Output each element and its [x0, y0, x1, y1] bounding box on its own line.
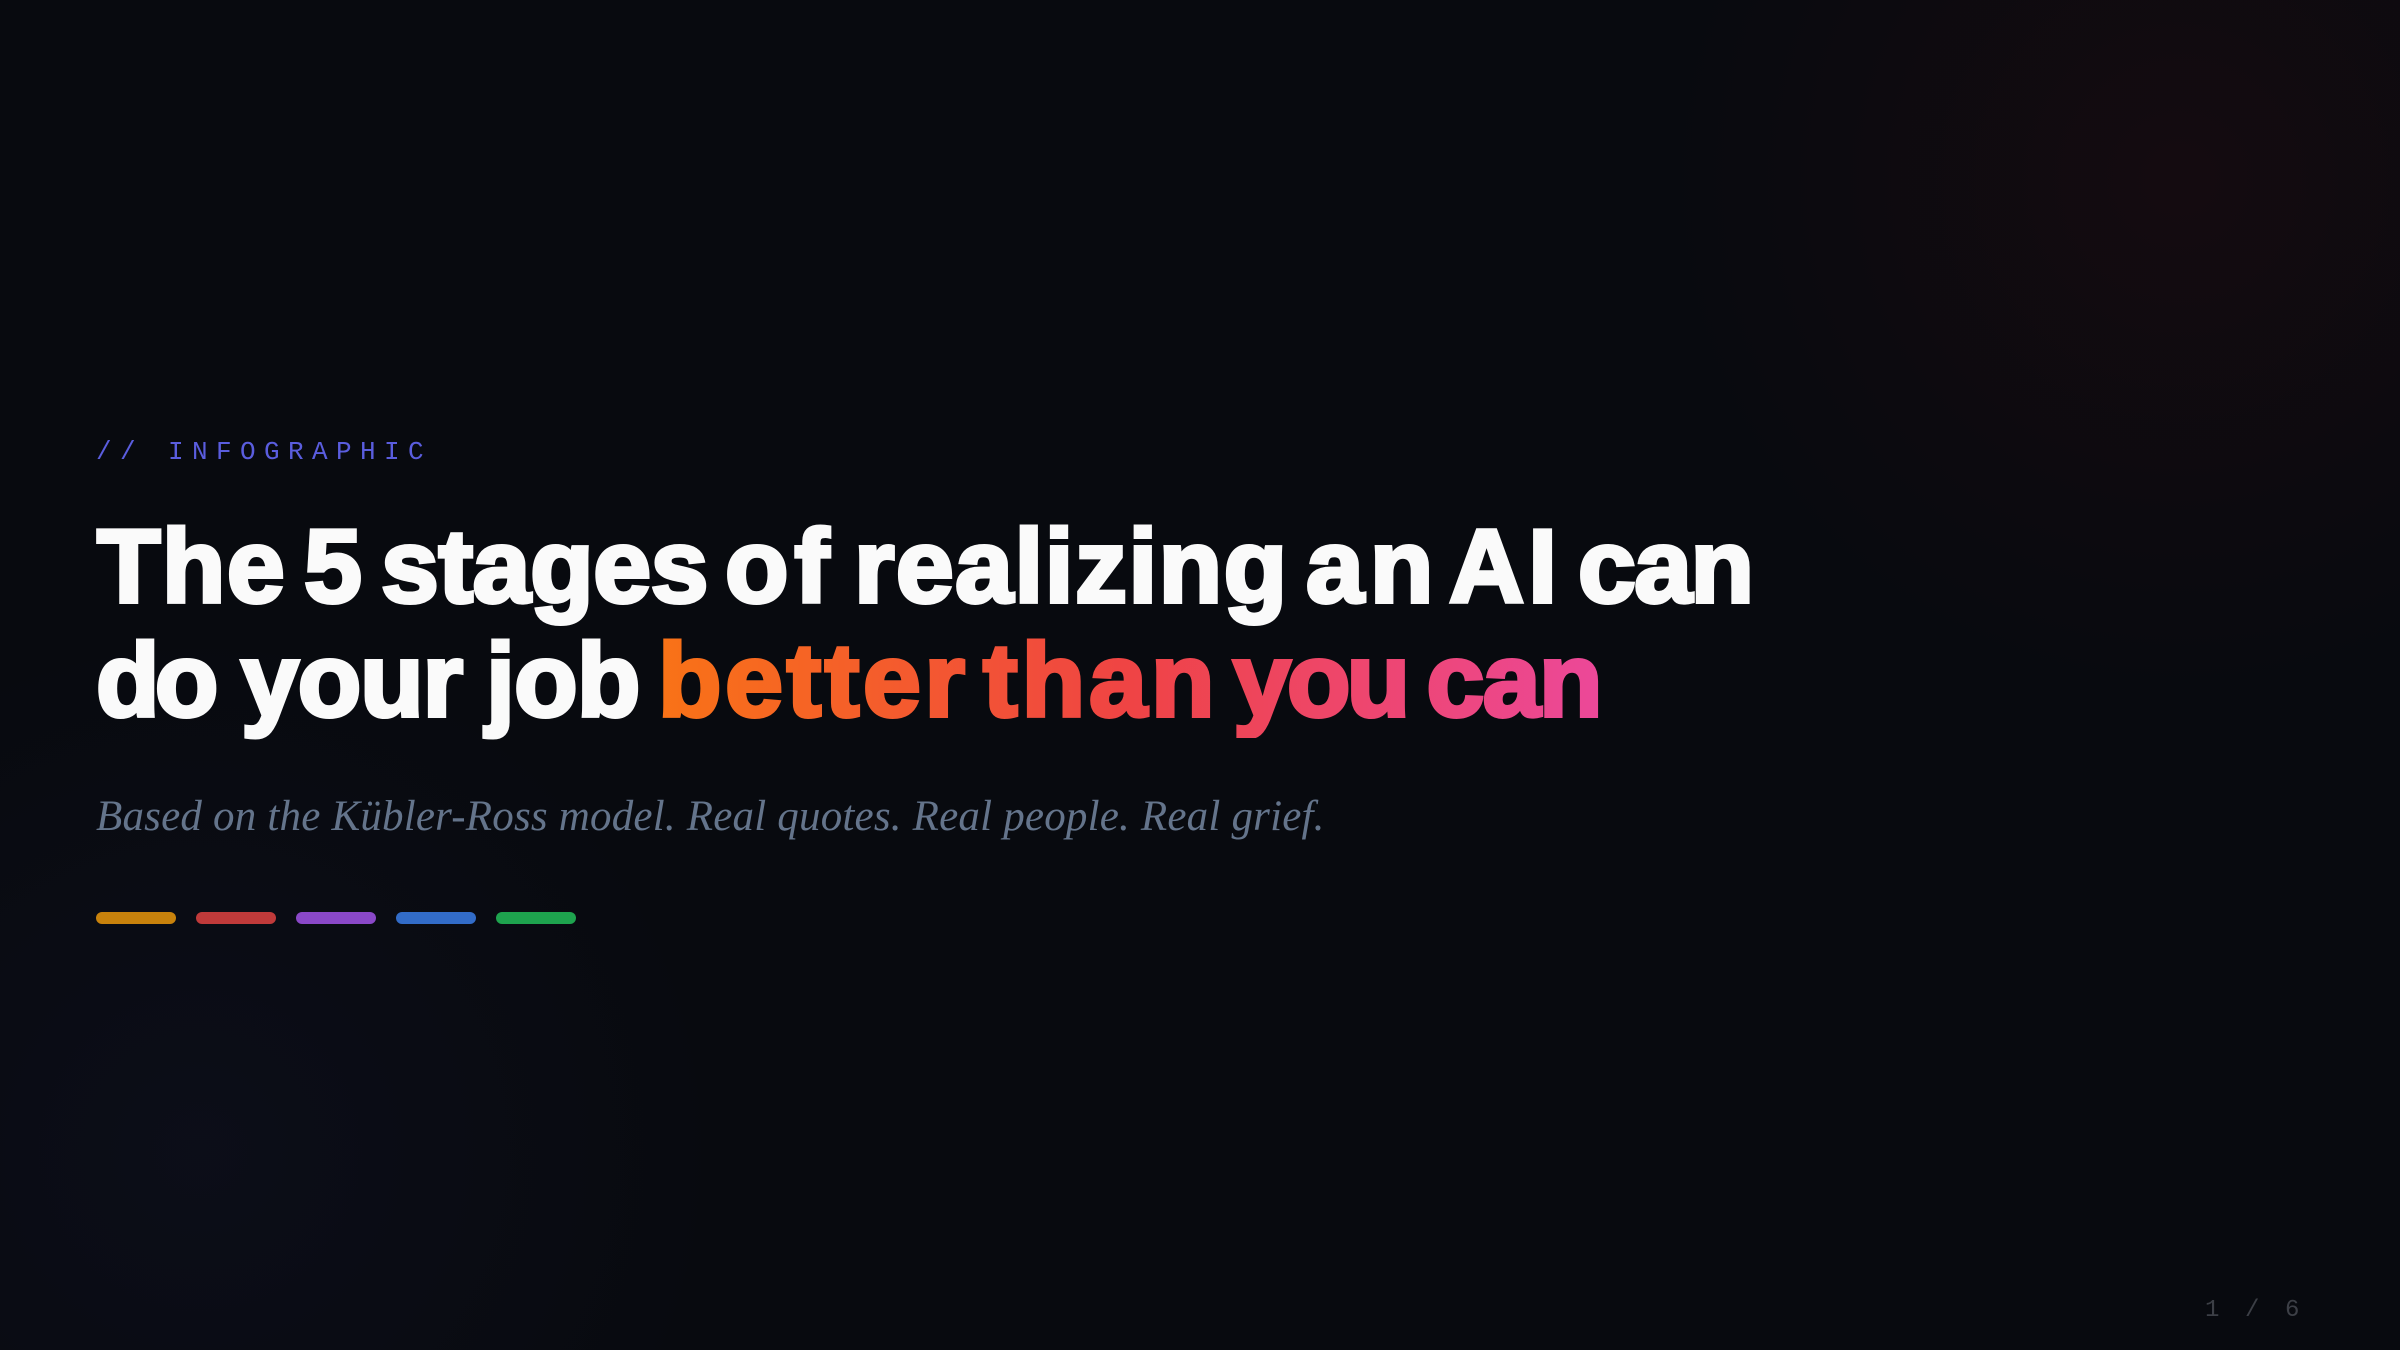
title: can: [1578, 509, 1752, 625]
title: 5: [304, 509, 362, 625]
title: you: [1233, 623, 1406, 739]
title: than: [983, 623, 1219, 739]
title: job: [486, 623, 640, 739]
title: your: [241, 623, 462, 739]
bar: denial: [96, 912, 176, 924]
title: AI: [1449, 509, 1561, 625]
title: can: [1426, 623, 1601, 739]
subtitle: Based on the Kübler-Ross model. Real quotes. Real people. Real grief.: [96, 793, 1325, 840]
bar: acceptance: [496, 912, 576, 924]
title: [96, 509, 1752, 740]
title: of: [725, 509, 835, 625]
page number: 1 / 6: [2205, 1297, 2305, 1324]
title: realizing: [854, 509, 1288, 625]
bar: anger: [196, 912, 276, 924]
title: an: [1306, 509, 1439, 625]
eyebrow label: // INFOGRAPHIC: [96, 437, 432, 467]
title: better: [658, 623, 969, 739]
bar: depression: [396, 912, 476, 924]
title: do: [96, 623, 214, 739]
bar: bargaining: [296, 912, 376, 924]
stage colour bars: [96, 912, 576, 924]
title: The: [97, 509, 286, 625]
title: stages: [381, 509, 708, 625]
